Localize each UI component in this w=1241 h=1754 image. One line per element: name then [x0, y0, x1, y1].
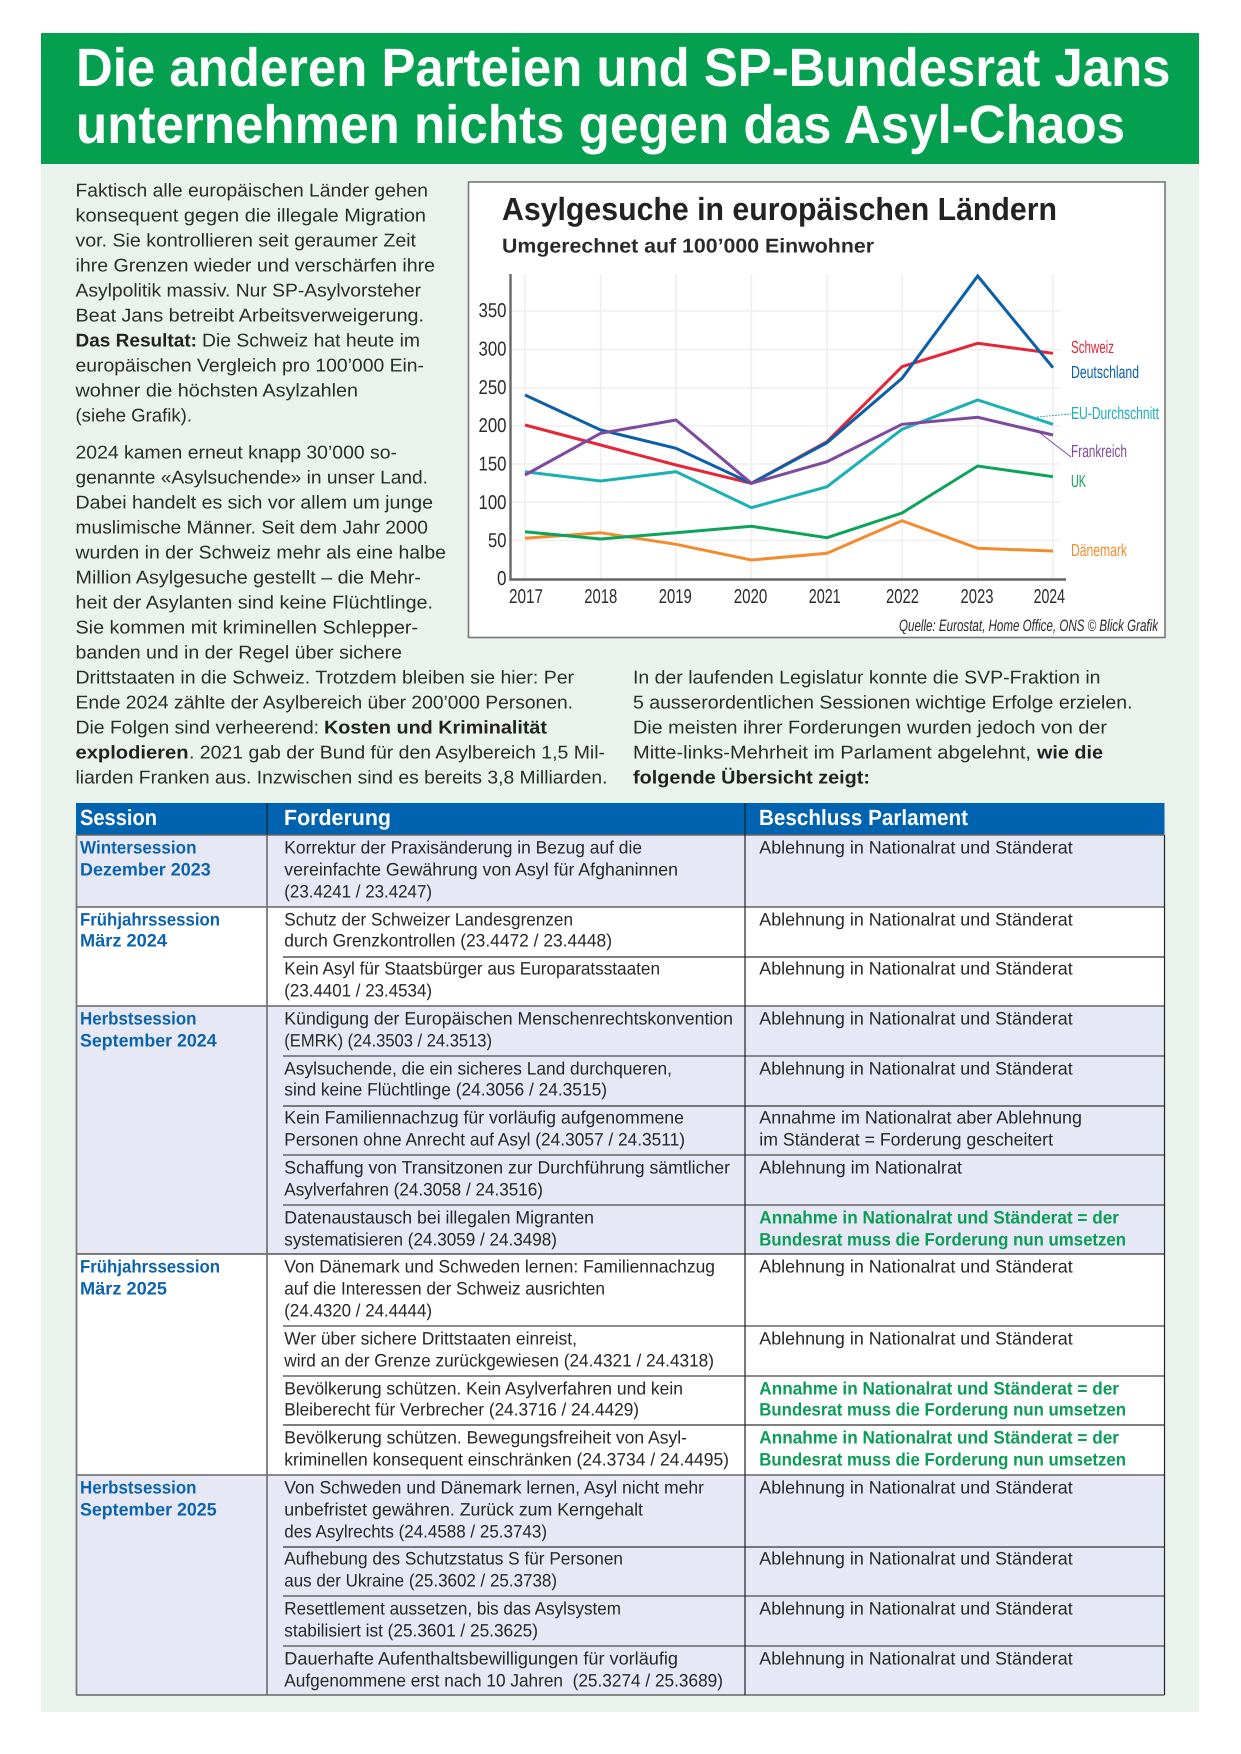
- Forderung column: Personen ohne Anrecht auf Asyl (24.3057 / 24.3511): [284, 1130, 685, 1150]
- line: Dänemark: [525, 521, 1053, 560]
- Forderung column: Aufhebung des Schutzstatus S für Personen: [284, 1548, 623, 1568]
- y axis labels: 300: [478, 338, 506, 360]
- x axis labels: 2018: [584, 586, 617, 608]
- Forderung column: durch Grenzkontrollen (23.4472 / 23.4448): [284, 930, 612, 950]
- intro paragraph 2: explodieren: [76, 742, 188, 762]
- intro paragraph 3: [633, 666, 1132, 788]
- intro paragraph 2: wurden in der Schweiz mehr als eine halbe: [74, 542, 446, 562]
- Beschluss column: im Ständerat = Forderung gescheitert: [759, 1130, 1053, 1150]
- Forderung column: Dauerhafte Aufenthaltsbewilligungen für vorläufig: [284, 1648, 678, 1668]
- intro paragraph 1: konsequent gegen die illegale Migration: [76, 204, 426, 226]
- intro paragraph 1: Asylpolitik massiv. Nur SP-Asylvorsteher: [76, 280, 421, 300]
- Forderung column: Asylsuchende, die ein sicheres Land durchqueren,: [284, 1058, 672, 1078]
- series labels: [1071, 337, 1159, 560]
- series labels: UK: [1071, 471, 1086, 491]
- session column: September 2024: [80, 1030, 217, 1050]
- session column: [80, 838, 220, 1520]
- Beschluss column: Annahme in Nationalrat und Ständerat = der: [759, 1208, 1119, 1228]
- Forderung column: Von Dänemark und Schweden lernen: Familiennachzug: [284, 1256, 715, 1276]
- series labels: EU-Durchschnitt: [1071, 403, 1159, 423]
- Forderung column: unbefristet gewähren. Zurück zum Kerngehalt: [284, 1500, 643, 1520]
- line: Schweiz: [525, 343, 1053, 483]
- line: Deutschland: [525, 276, 1053, 483]
- intro paragraph 2: muslimische Männer. Seit dem Jahr 2000: [76, 516, 428, 538]
- Beschluss column: Ablehnung in Nationalrat und Ständerat: [759, 1648, 1073, 1668]
- Beschluss column: Bundesrat muss die Forderung nun umsetzen: [759, 1450, 1126, 1470]
- table header row: Session: [80, 805, 157, 830]
- title banner: [41, 33, 1199, 164]
- y axis labels: 200: [478, 415, 506, 437]
- intro paragraph 2: genannte «Asylsuchende» in unser Land.: [76, 466, 428, 488]
- Forderung column: Bevölkerung schützen. Bewegungsfreiheit von Asyl-: [284, 1428, 687, 1448]
- intro paragraph 3: Die meisten ihrer Forderungen wurden jedoch von der: [633, 716, 1107, 738]
- Forderung column: systematisieren (24.3059 / 24.3498): [284, 1230, 557, 1250]
- Forderung column: (24.4320 / 24.4444): [284, 1300, 432, 1320]
- intro paragraph 2: heit der Asylanten sind keine Flüchtlinge.: [76, 592, 433, 612]
- Beschluss column: Ablehnung in Nationalrat und Ständerat: [759, 1058, 1073, 1078]
- intro paragraph 1: wohner die höchsten Asylzahlen: [74, 380, 358, 400]
- Forderung column: Bleiberecht für Verbrecher (24.3716 / 24.4429): [284, 1400, 639, 1420]
- Forderung column: Resettlement aussetzen, bis das Asylsystem: [284, 1598, 621, 1618]
- Forderung column: Kein Asyl für Staatsbürger aus Europaratsstaaten: [284, 958, 660, 978]
- intro paragraph 1: [74, 180, 435, 426]
- session column: März 2025: [80, 1278, 167, 1298]
- y axis labels: 50: [488, 530, 506, 552]
- chart subtitle: Umgerechnet auf 100’000 Einwohner: [502, 236, 874, 258]
- Forderung column: (23.4241 / 23.4247): [284, 882, 432, 902]
- series labels: Deutschland: [1071, 362, 1139, 382]
- session column: Frühjahrssession: [80, 1256, 220, 1276]
- chart panel: Asylgesuche: [468, 182, 1165, 638]
- session column: Wintersession: [80, 838, 196, 858]
- intro paragraph 1: europäischen Vergleich pro 100’000 Ein-: [76, 354, 424, 376]
- Forderung column: Bevölkerung schützen. Kein Asylverfahren und kein: [284, 1378, 683, 1398]
- Beschluss column: Ablehnung in Nationalrat und Ständerat: [759, 1598, 1073, 1618]
- Forderung column: Wer über sichere Drittstaaten einreist,: [284, 1328, 577, 1348]
- y axis labels: 250: [478, 377, 506, 399]
- Beschluss column: Annahme im Nationalrat aber Ablehnung: [759, 1108, 1082, 1128]
- session column: Herbstsession: [80, 1478, 196, 1498]
- Forderung column: Datenaustausch bei illegalen Migranten: [284, 1208, 594, 1228]
- intro paragraph 2: Dabei handelt es sich vor allem um junge: [76, 492, 433, 512]
- x axis labels: 2019: [659, 586, 692, 608]
- Forderung column: [283, 838, 733, 1690]
- Forderung column: wird an der Grenze zurückgewiesen (24.4321 / 24.4318): [283, 1350, 714, 1370]
- series labels: Schweiz: [1071, 337, 1114, 357]
- Beschluss column: Ablehnung in Nationalrat und Ständerat: [759, 838, 1073, 858]
- intro paragraph 2: Ende 2024 zählte der Asylbereich über 200’000 Personen.: [76, 692, 573, 712]
- Beschluss column: Ablehnung in Nationalrat und Ständerat: [759, 910, 1073, 930]
- session column: September 2025: [80, 1500, 217, 1520]
- intro paragraph 3: folgende Übersicht zeigt:: [633, 766, 870, 788]
- intro paragraph 2: Kosten und Kriminalität: [324, 716, 547, 738]
- Forderung column: Kündigung der Europäischen Menschenrechtskonvention: [284, 1008, 733, 1028]
- line: EU-Durchschnitt: [525, 400, 1053, 508]
- Beschluss column: Ablehnung in Nationalrat und Ständerat: [759, 958, 1073, 978]
- Forderung column: (23.4401 / 23.4534): [284, 980, 432, 1000]
- y axis labels: 150: [478, 454, 506, 476]
- Beschluss column: Ablehnung in Nationalrat und Ständerat: [759, 1478, 1073, 1498]
- Beschluss column: Annahme in Nationalrat und Ständerat = der: [759, 1428, 1119, 1448]
- Forderung column: (EMRK) (24.3503 / 24.3513): [284, 1030, 492, 1050]
- Forderung column: auf die Interessen der Schweiz ausrichten: [284, 1278, 605, 1298]
- Forderung column: stabilisiert ist (25.3601 / 25.3625): [284, 1620, 538, 1640]
- intro paragraph 1: Faktisch alle europäischen Länder gehen: [76, 180, 428, 200]
- x axis labels: 2023: [960, 586, 994, 608]
- intro paragraph 1: (siehe Grafik).: [76, 404, 192, 426]
- series labels: Frankreich: [1071, 441, 1127, 461]
- leader lines: [1037, 414, 1071, 457]
- y axis labels: 100: [478, 492, 506, 514]
- table header row: [76, 803, 1164, 835]
- table header row: Beschluss Parlament: [759, 805, 969, 830]
- x axis labels: 2017: [509, 586, 543, 608]
- intro paragraph 1: Die Schweiz hat heute im: [202, 330, 420, 350]
- session column: Herbstsession: [80, 1008, 196, 1028]
- x axis labels: 2020: [734, 586, 767, 608]
- Forderung column: Kein Familiennachzug für vorläufig aufgenommene: [284, 1108, 684, 1128]
- session column: Frühjahrssession: [80, 910, 220, 930]
- Forderung column: vereinfachte Gewährung von Asyl für Afghaninnen: [284, 860, 678, 880]
- Forderung column: Schaffung von Transitzonen zur Durchführung sämtlicher: [284, 1158, 730, 1178]
- series labels: Dänemark: [1071, 540, 1127, 560]
- Beschluss column: Ablehnung in Nationalrat und Ständerat: [759, 1008, 1073, 1028]
- x axis labels: 2021: [809, 586, 841, 608]
- y axis labels: 0: [497, 568, 506, 590]
- intro paragraph 2: Drittstaaten in die Schweiz. Trotzdem bleiben sie hier: Per: [76, 666, 574, 688]
- title banner: Die anderen Parteien und SP-Bundesrat Jans: [76, 38, 1170, 98]
- intro paragraph 2: 2024 kamen erneut knapp 30’000 so-: [76, 442, 397, 462]
- intro paragraph 3: 5 ausserordentlichen Sessionen wichtige Erfolge erzielen.: [633, 692, 1132, 712]
- intro paragraph 3: Mitte-links-Mehrheit im Parlament abgelehnt,: [633, 742, 1031, 762]
- intro paragraph 3: In der laufenden Legislatur konnte die SVP-Fraktion in: [633, 666, 1100, 688]
- Forderung column: Korrektur der Praxisänderung in Bezug auf die: [284, 838, 642, 858]
- line: UK: [525, 466, 1053, 539]
- y axis labels: 350: [478, 300, 506, 322]
- Beschluss column: [759, 838, 1126, 1668]
- Forderung column: kriminellen konsequent einschränken (24.3734 / 24.4495): [284, 1450, 729, 1470]
- Forderung column: aus der Ukraine (25.3602 / 25.3738): [284, 1570, 557, 1590]
- Forderung column: Asylverfahren (24.3058 / 24.3516): [284, 1180, 543, 1200]
- intro paragraph 2: Sie kommen mit kriminellen Schlepper-: [76, 616, 418, 638]
- x axis labels: [509, 586, 1065, 608]
- chart title: Asylgesuche in europäischen Ländern: [502, 191, 1057, 227]
- intro paragraph 2: liarden Franken aus. Inzwischen sind es bereits 3,8 Milliarden.: [76, 766, 608, 788]
- line: Frankreich: [525, 417, 1053, 483]
- Beschluss column: Ablehnung in Nationalrat und Ständerat: [759, 1548, 1073, 1568]
- intro paragraph 2: [74, 442, 607, 788]
- Forderung column: Von Schweden und Dänemark lernen, Asyl nicht mehr: [284, 1478, 704, 1498]
- Forderung column: sind keine Flüchtlinge (24.3056 / 24.3515): [284, 1080, 607, 1100]
- x axis labels: 2024: [1034, 586, 1065, 608]
- Beschluss column: Bundesrat muss die Forderung nun umsetzen: [759, 1400, 1126, 1420]
- session column: Dezember 2023: [80, 860, 211, 880]
- intro paragraph 1: Das Resultat:: [76, 330, 197, 350]
- intro paragraph 2: . 2021 gab der Bund für den Asylbereich 1,5 Mil-: [189, 742, 605, 762]
- y axis labels: [478, 300, 506, 590]
- Beschluss column: Ablehnung in Nationalrat und Ständerat: [759, 1328, 1073, 1348]
- Forderung column: Aufgenommene erst nach 10 Jahren (25.3274 / 25.3689): [284, 1670, 723, 1690]
- intro paragraph 1: vor. Sie kontrollieren seit geraumer Zeit: [76, 230, 416, 250]
- table: [76, 803, 1164, 1695]
- session column: März 2024: [80, 930, 167, 950]
- x axis labels: 2022: [886, 586, 919, 608]
- intro paragraph 3: wie die: [1036, 742, 1103, 762]
- Forderung column: Schutz der Schweizer Landesgrenzen: [284, 910, 573, 930]
- intro paragraph 2: Die Folgen sind verheerend:: [76, 716, 319, 738]
- intro paragraph 2: Million Asylgesuche gestellt – die Mehr-: [76, 566, 421, 588]
- table header row: Forderung: [284, 805, 391, 830]
- Beschluss column: Ablehnung im Nationalrat: [759, 1158, 962, 1178]
- Beschluss column: Annahme in Nationalrat und Ständerat = der: [759, 1378, 1119, 1398]
- Beschluss column: Ablehnung in Nationalrat und Ständerat: [759, 1256, 1073, 1276]
- Beschluss column: Bundesrat muss die Forderung nun umsetzen: [759, 1230, 1126, 1250]
- title banner: unternehmen nichts gegen das Asyl-Chaos: [76, 95, 1125, 155]
- chart axes: [510, 274, 1066, 580]
- intro paragraph 2: banden und in der Regel über sichere: [76, 642, 402, 662]
- Forderung column: des Asylrechts (24.4588 / 25.3743): [284, 1522, 547, 1542]
- intro paragraph 1: Beat Jans betreibt Arbeitsverweigerung.: [76, 304, 424, 326]
- intro paragraph 1: ihre Grenzen wieder und verschärfen ihre: [76, 254, 435, 276]
